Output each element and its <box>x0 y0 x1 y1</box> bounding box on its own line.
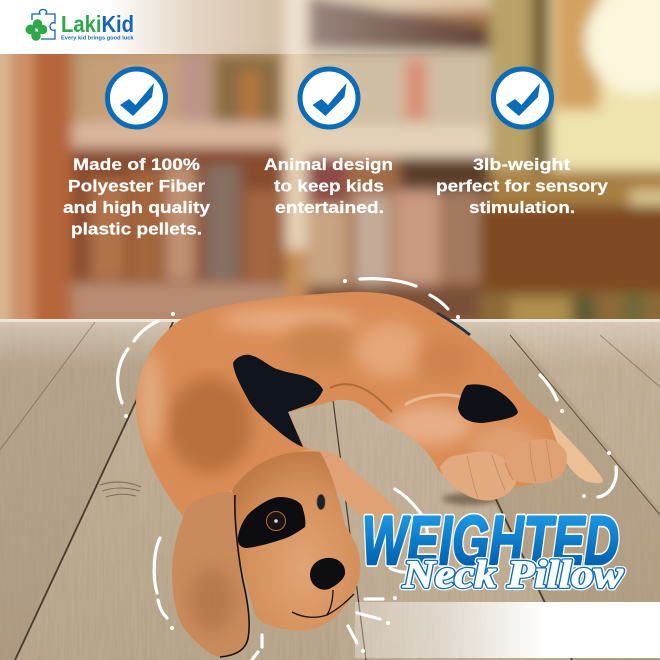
column 2: text: to keep kids <box>274 176 384 196</box>
black back patch <box>233 355 323 447</box>
title line: Neck Pillow: Neck Pillow <box>402 553 624 596</box>
wood knot <box>100 482 141 497</box>
column 1: text: and high quality <box>63 198 211 217</box>
column 3: text: 3lb-weight <box>473 155 570 174</box>
title line: Neck Pillow: Neck Pillow <box>402 553 624 596</box>
title line: Neck Pillow: Neck Pillow <box>402 553 624 596</box>
title: Weighted Neck Pillow <box>362 502 624 596</box>
eye <box>266 512 286 530</box>
column 1: check icon <box>108 69 166 127</box>
column 1: text: plastic pellets. <box>71 220 202 238</box>
paw toes <box>467 440 552 498</box>
far ear <box>312 451 400 517</box>
top white band <box>0 0 660 54</box>
mouth <box>292 590 354 617</box>
column 3: text: stimulation. <box>469 198 575 217</box>
column 3: check icon <box>494 69 552 127</box>
wood floor <box>0 319 660 660</box>
motion dashes <box>118 279 616 660</box>
pillow body <box>136 292 558 525</box>
black foot patch <box>458 384 518 423</box>
back paw <box>505 439 567 483</box>
head <box>232 451 360 631</box>
tail <box>547 417 603 483</box>
column 2: text: Animal design <box>264 155 393 174</box>
paw shadow <box>442 493 498 505</box>
column 2: text: entertained. <box>275 198 384 217</box>
column 1: text: Made of 100% <box>73 155 200 174</box>
nose <box>310 558 345 590</box>
column 3: text <box>436 155 609 217</box>
wordmark: LakiKid <box>61 11 134 37</box>
near ear <box>172 492 249 657</box>
column 1: text <box>63 155 211 238</box>
column 2: text <box>264 155 393 217</box>
background: blurred bookshelf <box>0 0 660 340</box>
column 2: check icon <box>300 69 358 127</box>
bottom white band <box>355 602 660 658</box>
column 1: text: Polyester Fiber <box>68 176 205 196</box>
far eye <box>317 494 325 510</box>
front paw <box>440 452 517 501</box>
neck pillow: plush dog <box>120 280 620 657</box>
icon: puzzle piece with clover <box>26 10 55 41</box>
dark edge on back <box>437 313 470 335</box>
column 3: text: perfect for sensory <box>436 176 609 196</box>
logo <box>26 10 134 42</box>
tagline: Every kid brings good luck <box>61 36 134 42</box>
eye patch <box>238 497 305 548</box>
